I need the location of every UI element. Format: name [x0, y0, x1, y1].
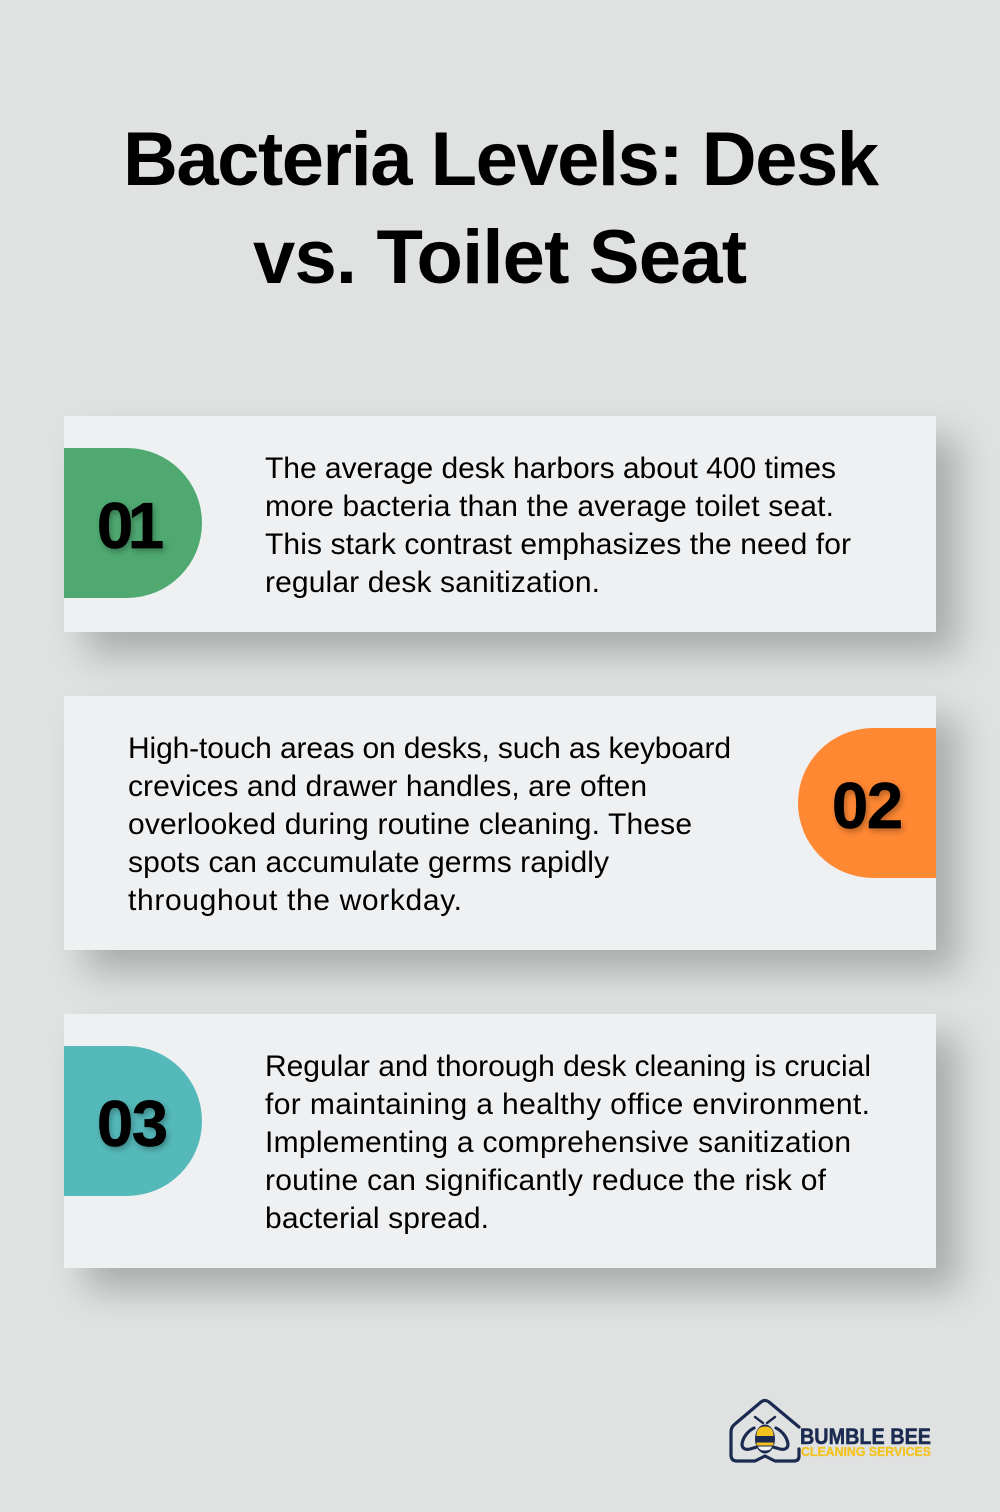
text block: card 02: crevices and drawer handles, are often	[128, 770, 647, 803]
icon: house outline with bee	[731, 1400, 799, 1461]
text block: card 03	[265, 1050, 871, 1235]
text block: card 03: bacterial spread.	[265, 1202, 489, 1235]
title: vs. Toilet Seat	[253, 215, 747, 300]
wordmark: Cleaning Services: CLEANING SERVICES	[801, 1445, 931, 1459]
text block: card 01: regular desk sanitization.	[265, 566, 600, 599]
badge: 01: 01	[97, 489, 164, 562]
badge: 02	[798, 728, 936, 878]
text block: card 02: spots can accumulate germs rapidly	[128, 846, 609, 879]
badge: 02: 02	[832, 769, 903, 842]
text block: card 03: Implementing a comprehensive sanitization	[265, 1126, 851, 1159]
panel: card 02	[64, 696, 936, 950]
text block: card 01	[265, 452, 851, 599]
badge: 03: 03	[97, 1087, 168, 1160]
text block: card 01: more bacteria than the average toilet seat.	[265, 490, 834, 523]
text block: card 03: routine can significantly reduce the risk of	[265, 1164, 827, 1197]
text block: card 01: The average desk harbors about 400 times	[265, 452, 836, 485]
title	[123, 117, 880, 300]
text block: card 02: overlooked during routine cleaning. These	[128, 808, 692, 841]
title: Bacteria Levels: Desk	[123, 117, 880, 202]
text block: card 03: Regular and thorough desk cleaning is crucial	[265, 1050, 871, 1083]
panel: card 01	[64, 416, 936, 632]
text block: card 01: This stark contrast emphasizes the need for	[265, 528, 851, 561]
text block: card 03: for maintaining a healthy office environment.	[265, 1088, 870, 1121]
text block: card 02	[128, 732, 731, 917]
badge: 03	[64, 1046, 202, 1196]
panel: card 03	[64, 1014, 936, 1268]
wordmark: Bumble Bee: BUMBLE BEE	[800, 1424, 931, 1449]
text block: card 02: throughout the workday.	[128, 884, 462, 917]
text block: card 02: High-touch areas on desks, such as keyboard	[128, 732, 731, 765]
badge: 01	[64, 448, 202, 598]
